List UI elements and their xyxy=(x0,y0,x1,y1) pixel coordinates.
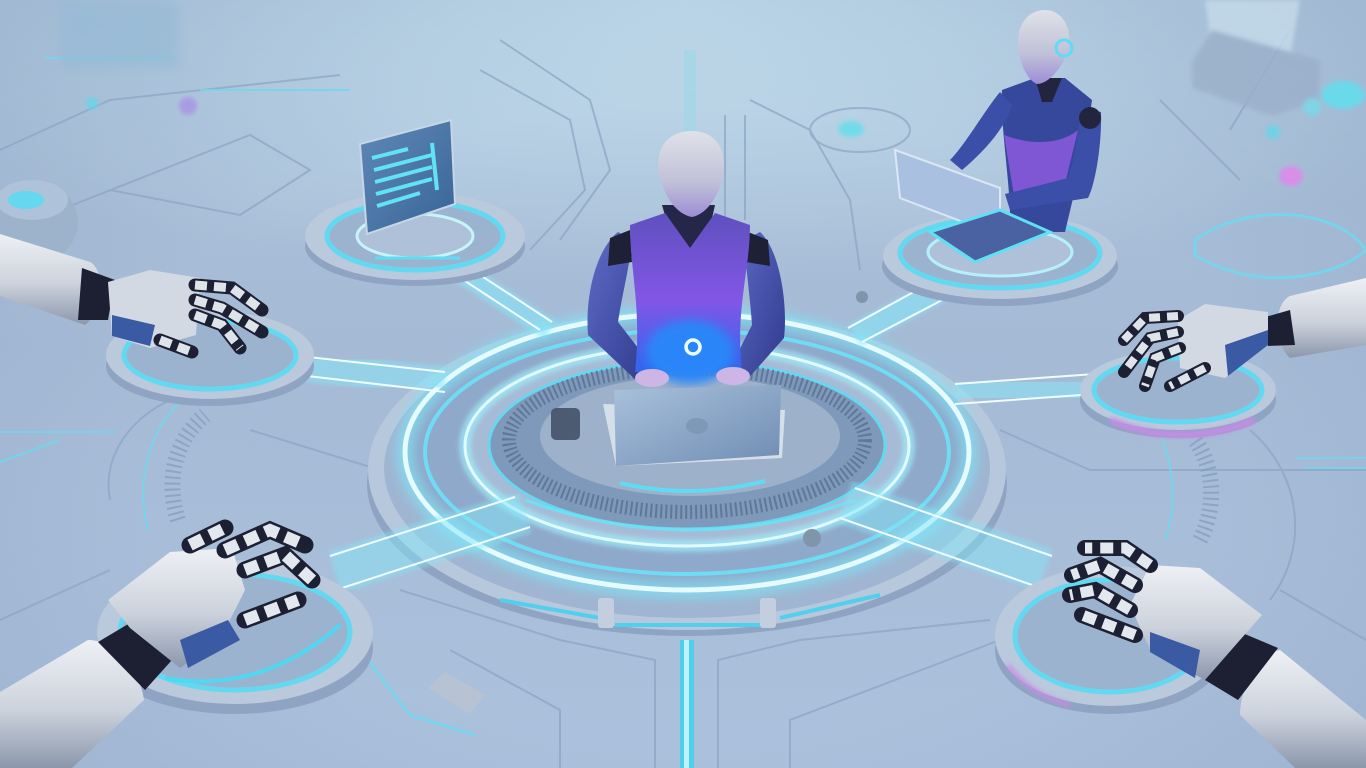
prop: left cylinder xyxy=(0,180,78,262)
robot: right arm xyxy=(730,232,785,382)
robot: left arm xyxy=(588,232,652,382)
prop: top left device xyxy=(60,0,180,70)
prop: top right cube xyxy=(1192,0,1320,116)
robot: torso xyxy=(630,213,750,372)
robot: top right arms xyxy=(950,92,1012,170)
hatched ring segments on floor xyxy=(172,415,1211,540)
top right platform and robot xyxy=(882,10,1118,306)
connectors: light beams from hub to satellite platforms xyxy=(290,50,1095,768)
hand: left fingers xyxy=(160,285,262,352)
connector: bottom vertical light bar xyxy=(680,640,694,768)
icon: document panel xyxy=(360,120,455,234)
hand: bottom right palm xyxy=(1130,565,1262,680)
background props xyxy=(0,0,1365,262)
robot: chest ring light xyxy=(686,340,700,354)
robot: top right head xyxy=(1018,10,1069,84)
left platform with robot hand xyxy=(0,234,314,406)
robot: shoulders xyxy=(608,230,632,266)
central robot xyxy=(551,131,785,466)
right platform with robot hand xyxy=(1080,278,1366,438)
hand: right palm xyxy=(1178,304,1268,378)
robot: phone on desk xyxy=(551,408,580,440)
platform: top right xyxy=(882,213,1118,306)
hand: bottom left fingers xyxy=(190,528,312,620)
laptop xyxy=(603,385,785,466)
bottom left platform with robot hand xyxy=(0,528,485,768)
hand: right fingers xyxy=(1124,316,1205,386)
hand: bottom left palm xyxy=(108,548,245,668)
bottom right platform with robot hand xyxy=(995,548,1366,768)
arm: left forearm xyxy=(0,234,101,325)
hand: bottom right fingers xyxy=(1070,548,1150,635)
robot: neck xyxy=(662,205,715,250)
connector: top vertical light bar xyxy=(684,50,696,135)
robot: top right body xyxy=(1002,78,1092,232)
hand: left palm xyxy=(108,270,200,348)
arm: bottom right forearm xyxy=(1240,650,1366,768)
icon: small chip on floor xyxy=(428,672,485,714)
top left platform with document icon xyxy=(305,120,525,286)
prop: glow dots xyxy=(86,81,1365,186)
robot: hands xyxy=(635,369,669,387)
central hub rings xyxy=(367,291,1007,636)
hub: bottom rim details xyxy=(500,595,880,625)
arm: right forearm xyxy=(1278,278,1366,358)
robot: head xyxy=(658,131,724,217)
arm: bottom left forearm xyxy=(0,640,144,768)
robot: top right laptop xyxy=(895,150,1000,236)
